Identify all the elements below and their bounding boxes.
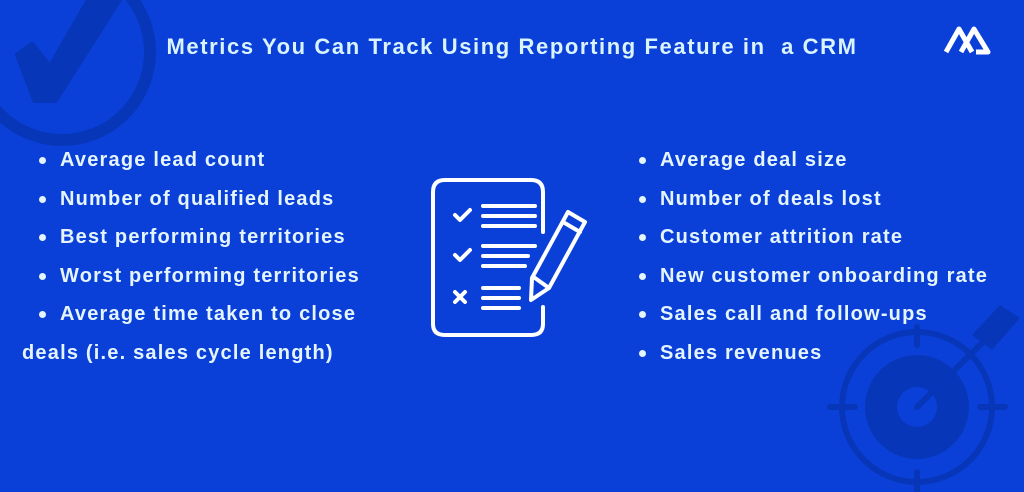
logo: [944, 26, 990, 54]
right list: New customer onboarding rate: [660, 265, 988, 287]
right list: Average deal size: [660, 149, 848, 171]
right list: Customer attrition rate: [660, 226, 903, 248]
right list: Number of deals lost: [660, 188, 882, 210]
left list: Number of qualified leads: [60, 188, 334, 210]
right list: [639, 149, 988, 364]
left list: [22, 149, 360, 364]
left list: deals (i.e. sales cycle length): [22, 342, 334, 364]
left list: Average time taken to close: [60, 303, 356, 325]
icon: checklist with pencil: [431, 178, 588, 337]
left list: Worst performing territories: [60, 265, 360, 287]
left list: Best performing territories: [60, 226, 346, 248]
decoration: checkmark circle: [0, 0, 156, 146]
title: Metrics You Can Track Using Reporting Feature in a CRM: [166, 34, 858, 59]
decoration: target: [827, 305, 1020, 492]
left list: Average lead count: [60, 149, 265, 171]
right list: Sales revenues: [660, 342, 822, 364]
right list: Sales call and follow-ups: [660, 303, 928, 325]
